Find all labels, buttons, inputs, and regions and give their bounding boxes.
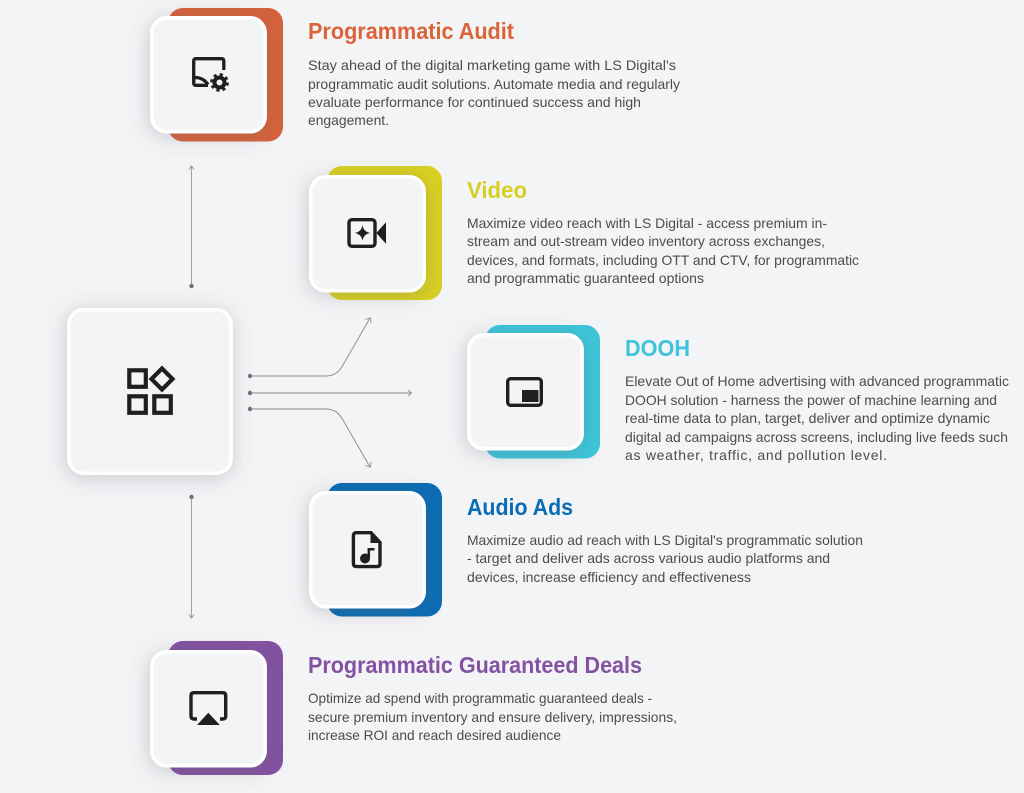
text block: Maximize video reach with LS Digital - access premium in- — [467, 215, 827, 231]
text block: digital ad campaigns across screens, including live feeds such — [625, 429, 1008, 445]
text block — [625, 373, 1009, 463]
icon: screen with gear — [194, 59, 228, 90]
panel: DOOH — [469, 325, 1009, 463]
arrow: to DOOH — [248, 390, 412, 396]
icon: screen cast — [191, 693, 226, 725]
card: white front — [152, 652, 265, 766]
icon: music file — [353, 533, 381, 567]
heading: Programmatic Guaranteed Deals — [308, 652, 642, 678]
card: cyan backing — [485, 325, 600, 458]
arrow: down to Programmatic Guaranteed Deals — [189, 495, 194, 618]
central card — [69, 310, 231, 473]
text block: Maximize audio ad reach with LS Digital's programmatic solution — [467, 532, 863, 548]
text block: increase ROI and reach desired audience — [308, 727, 561, 743]
text block — [467, 532, 863, 585]
heading: Video — [467, 177, 527, 203]
icon: shapes grid — [129, 368, 172, 413]
text block: secure premium inventory and ensure delivery, impressions, — [308, 709, 677, 725]
card: blue backing — [327, 483, 442, 616]
text block: engagement. — [308, 112, 389, 128]
icon: picture in picture — [508, 379, 541, 405]
panel: Video — [311, 166, 859, 300]
card: purple backing — [168, 641, 283, 775]
panel: Audio Ads — [311, 483, 863, 616]
text block: as weather, traffic, and pollution level. — [625, 447, 887, 463]
heading: Programmatic Audit — [308, 18, 514, 44]
text block: evaluate performance for continued success and high — [308, 94, 641, 110]
text block: programmatic audit solutions. Automate media and regularly — [308, 76, 680, 92]
text block: DOOH solution - harness the power of machine learning and — [625, 392, 997, 408]
panel: Programmatic Guaranteed Deals — [152, 641, 677, 775]
arrow: to Audio Ads — [248, 407, 371, 467]
icon: video camera — [349, 220, 386, 246]
text block: - target and deliver ads across various audio platforms and — [467, 550, 830, 566]
text block: Optimize ad spend with programmatic guaranteed deals - — [308, 690, 652, 706]
text block: Stay ahead of the digital marketing game with LS Digital's — [308, 57, 676, 73]
heading: DOOH — [625, 335, 690, 361]
card: white front — [311, 493, 424, 607]
card: white front — [469, 335, 582, 449]
card: yellow backing — [327, 166, 442, 300]
arrow: to Video — [248, 318, 371, 378]
text block: and programmatic guaranteed options — [467, 270, 704, 286]
text block — [467, 215, 859, 286]
panel: Programmatic Audit — [152, 8, 680, 142]
heading: Audio Ads — [467, 494, 573, 520]
text block: stream and out-stream video inventory across exchanges, — [467, 233, 825, 249]
arrow: up to Programmatic Audit — [189, 166, 194, 288]
text block — [308, 690, 677, 743]
text block: Elevate Out of Home advertising with advanced programmatic — [625, 373, 1009, 389]
text block — [308, 57, 680, 128]
text block: devices, and formats, including OTT and CTV, for programmatic — [467, 252, 859, 268]
text block: devices, increase efficiency and effectiveness — [467, 569, 751, 585]
card: orange backing — [168, 8, 283, 142]
card: white front — [152, 18, 265, 132]
text block: real-time data to plan, target, deliver and optimize dynamic — [625, 410, 990, 426]
card: white front — [311, 177, 424, 291]
